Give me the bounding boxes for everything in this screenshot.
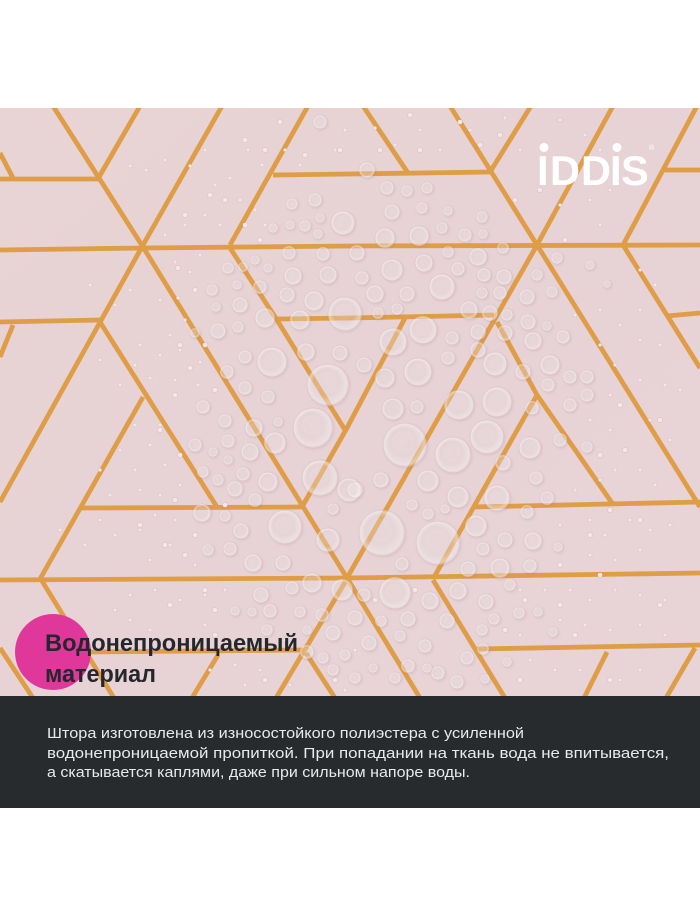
large water droplets	[188, 115, 611, 689]
heading	[45, 630, 298, 688]
description text: а скатывается каплями, даже при сильном напоре воды.	[47, 764, 470, 781]
gold geometric pattern	[0, 106, 700, 698]
logo: IDDIS: IDDIS	[537, 147, 649, 194]
description text: водонепроницаемой пропиткой. При попадании на ткань вода не впитывается,	[47, 745, 669, 762]
logo: IDDIS: ®	[649, 144, 655, 152]
infographic canvas	[0, 108, 700, 808]
magenta accent circle	[15, 614, 91, 690]
dark description panel	[0, 696, 700, 808]
description text: Штора изготовлена из износостойкого полиэстера с усиленной	[47, 725, 524, 742]
heading: материал	[45, 661, 156, 688]
heading: Водонепроницаемый	[45, 630, 298, 657]
photo panel: waterproof fabric	[0, 106, 700, 698]
tiny water droplets	[60, 115, 680, 690]
description text	[47, 725, 669, 781]
